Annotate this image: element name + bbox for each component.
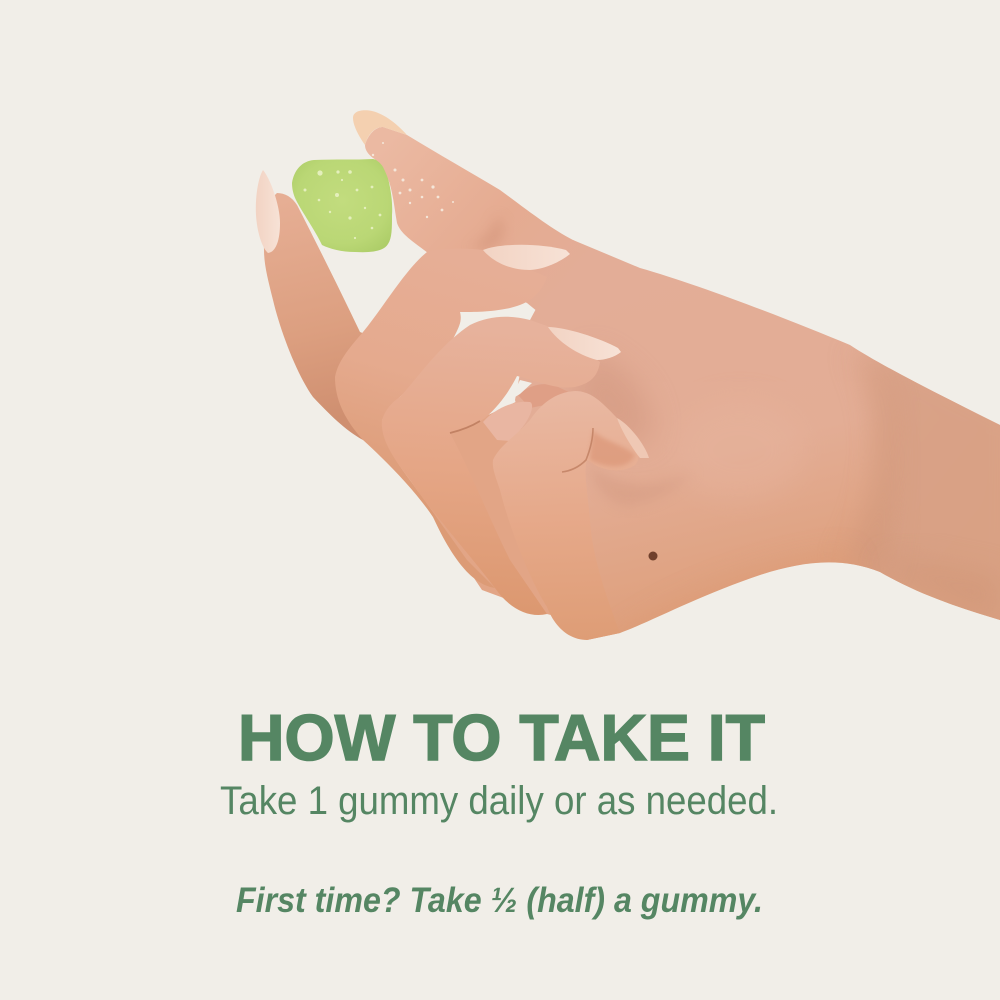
hand holding gummy illustration [256,110,1000,660]
palm highlight [675,400,805,500]
forearm tone [867,358,1000,620]
gummy [292,159,392,252]
ring nail [548,327,621,360]
thumb nail [353,110,407,145]
pinky crease [562,428,593,472]
sugar on thumb [372,142,454,218]
thumb [353,110,640,330]
fingertips behind curled fingers [483,384,575,441]
pinky finger [493,391,658,640]
thumb joint shade [470,214,504,250]
title: HOW TO TAKE IT [238,701,765,774]
lower forearm shade [880,560,1000,625]
gap between fingers [510,380,532,400]
base fill beneath curled fingers [382,400,620,633]
shadow behind fingers [578,363,646,435]
instruction text: Take 1 gummy daily or as needed. [220,779,778,823]
index nail [256,170,280,253]
wrist shadow [868,380,873,382]
first-time note: First time? Take ½ (half) a gummy. [236,881,763,920]
mole [648,552,658,560]
pinky tip shade [590,430,635,466]
middle finger [335,245,570,588]
middle nail [483,245,570,270]
ring finger crease [450,421,480,433]
hollow of palm [604,482,640,497]
arm and palm [515,240,1000,660]
pinky nail [617,418,649,458]
palm lower warm tone [638,562,846,626]
sugar crystals [304,170,381,239]
index finger [256,170,365,440]
ring finger [382,317,621,615]
